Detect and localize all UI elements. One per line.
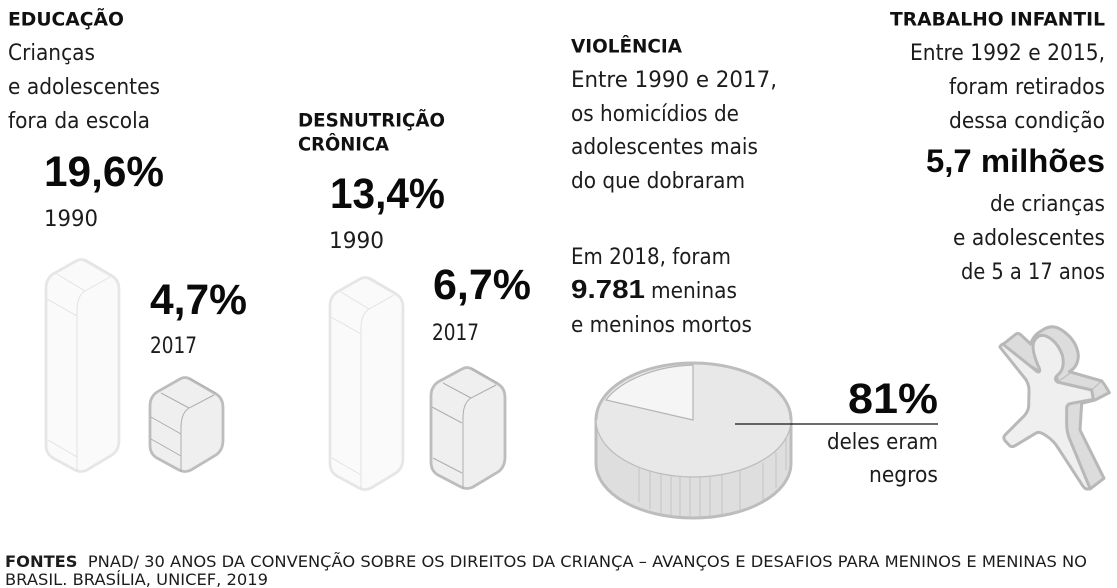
text block: mortos em 2018 xyxy=(571,244,752,338)
text block: educação description: Crianças xyxy=(8,40,95,66)
text block: deles eram negros: negros xyxy=(869,462,938,488)
number: 13,4%: 13,4% xyxy=(330,170,445,218)
panel: trabalho infantil xyxy=(890,10,1109,489)
heading: desnutrição crônica: DESNUTRIÇÃO xyxy=(298,108,445,132)
heading: educação: EDUCAÇÃO xyxy=(8,8,124,30)
panel: violência xyxy=(571,36,938,518)
number: 81%: 81% xyxy=(848,375,938,423)
heading: desnutrição crônica xyxy=(298,108,445,156)
text block: mortos em 2018: meninas xyxy=(651,278,737,304)
text block: homicídios: do que dobraram xyxy=(571,168,745,194)
text block: educação description xyxy=(8,40,160,134)
text block: fontes xyxy=(5,552,1087,588)
year: 2017: 2017 xyxy=(150,333,197,359)
bar: educação 1990 xyxy=(46,259,119,472)
text block: educação description: e adolescentes xyxy=(8,74,160,100)
number: 5,7 milhões: 5,7 milhões xyxy=(926,143,1105,179)
text block: retirados xyxy=(910,40,1105,134)
icon: child figure xyxy=(1000,327,1109,489)
year: 2017: 2017 xyxy=(432,320,479,346)
text block: crianças xyxy=(953,191,1105,285)
line: pie callout xyxy=(735,423,938,425)
text block: deles eram negros: deles eram xyxy=(827,429,938,455)
text block: homicídios: adolescentes mais xyxy=(571,134,758,160)
panel: desnutrição crônica xyxy=(298,108,531,490)
text block: deles eram negros xyxy=(827,429,938,488)
text block: homicídios xyxy=(571,67,777,194)
bar: educação 2017 xyxy=(150,378,223,472)
text block: mortos em 2018: e meninos mortos xyxy=(571,312,752,338)
bar: desnutrição 1990 xyxy=(330,277,403,490)
chart: pie 81% xyxy=(596,363,791,518)
bar: desnutrição 2017 xyxy=(431,368,505,489)
heading: desnutrição crônica: CRÔNICA xyxy=(298,134,390,156)
number: 6,7%: 6,7% xyxy=(433,261,531,309)
text block: homicídios: Entre 1990 e 2017, xyxy=(571,67,777,93)
text block: homicídios: os homicídios de xyxy=(571,101,739,127)
year: 1990: 1990 xyxy=(44,206,98,232)
heading: violência: VIOLÊNCIA xyxy=(571,36,683,58)
number: 4,7%: 4,7% xyxy=(150,276,247,324)
number: 19,6%: 19,6% xyxy=(44,148,164,196)
text block: mortos em 2018: Em 2018, foram xyxy=(571,244,731,270)
text block: educação description: fora da escola xyxy=(8,108,150,134)
panel: educação xyxy=(8,8,247,472)
year: 1990: 1990 xyxy=(329,228,384,254)
text block: crianças: de crianças xyxy=(990,191,1105,217)
text block: mortos em 2018: 9.781 xyxy=(571,274,645,304)
text block: fontes: FONTES PNAD/ 30 ANOS DA CONVENÇÃO SOBRE OS DIREITOS DA CRIANÇA – AVANÇOS E DESAFIOS PARA MENINOS E MENINAS NO xyxy=(5,552,1087,571)
heading: trabalho infantil: TRABALHO INFANTIL xyxy=(890,10,1105,30)
